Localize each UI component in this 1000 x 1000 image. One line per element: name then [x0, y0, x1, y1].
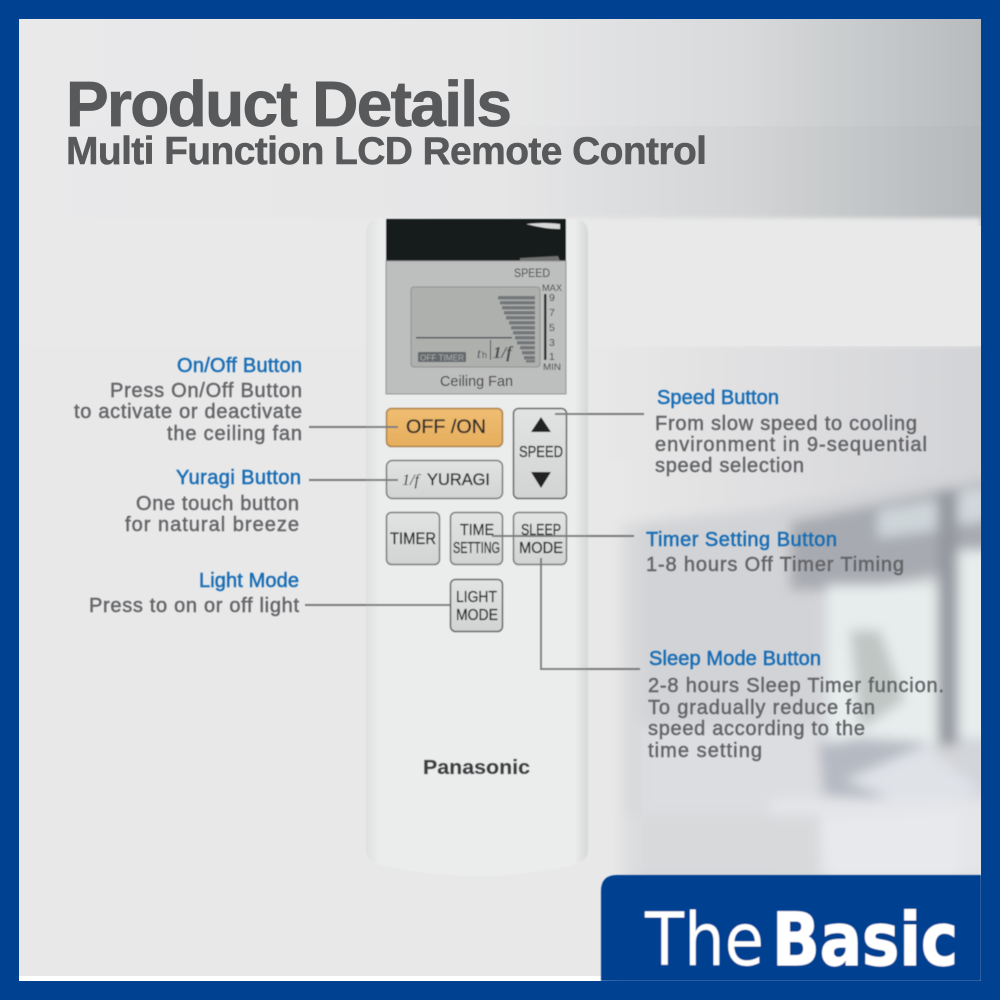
- heading: [66, 68, 707, 173]
- button: off/on: OFF /ON: [406, 417, 486, 438]
- callout: sleep mode button: 2-8 hours Sleep Timer funcion.: [648, 675, 944, 697]
- LCD symbols: 1/f: [493, 343, 514, 362]
- button: speed: SPEED: [519, 444, 563, 461]
- button: time setting: [450, 512, 502, 564]
- callout: timer setting button: Timer Setting Button: [646, 529, 837, 551]
- callout: sleep mode button: time setting: [648, 740, 762, 762]
- button: light mode: MODE: [456, 607, 498, 624]
- speed scale: MIN: [543, 362, 561, 372]
- off timer tag: OFF TIMER: [420, 354, 464, 362]
- callout: on/off button: to activate or deactivate: [74, 401, 302, 423]
- speed scale: 3: [549, 337, 555, 349]
- callout: yuragi button: for natural breeze: [125, 514, 299, 536]
- display panel: [386, 261, 566, 394]
- LCD screen: [411, 287, 540, 367]
- callout: sleep mode button: To gradually reduce fan: [648, 697, 875, 719]
- callout: on/off button: Press On/Off Button: [110, 380, 302, 402]
- callout: light mode: Press to on or off light: [89, 595, 299, 617]
- button: yuragi: [386, 460, 502, 498]
- button: sleep mode: MODE: [519, 540, 563, 557]
- callout: yuragi button: [125, 467, 301, 536]
- speed scale: 7: [549, 307, 555, 319]
- logo text: The: [644, 898, 764, 983]
- callout: speed button: Speed Button: [657, 387, 779, 409]
- button: off/on: [386, 408, 502, 446]
- button: light mode: LIGHT: [456, 589, 497, 606]
- callout: yuragi button: One touch button: [136, 493, 299, 515]
- LCD symbols: h: [482, 350, 487, 360]
- button: sleep mode: [514, 512, 566, 564]
- speed label: SPEED: [514, 266, 550, 280]
- callout: on/off button: [74, 355, 302, 445]
- callout: yuragi button: Yuragi Button: [176, 467, 301, 489]
- black top band: [386, 219, 566, 261]
- button: sleep mode: SLEEP: [521, 522, 561, 539]
- speed scale: [542, 283, 562, 372]
- LCD symbols: [477, 340, 514, 362]
- callout: sleep mode button: Sleep Mode Button: [649, 648, 821, 670]
- brand: Panasonic: Panasonic: [423, 757, 530, 779]
- callout: speed button: [655, 387, 927, 477]
- button: time setting: TIME: [460, 522, 494, 539]
- callout: on/off button: the ceiling fan: [167, 423, 302, 445]
- callout: speed button: From slow speed to cooling: [655, 413, 917, 435]
- callout lines: [305, 414, 644, 669]
- remote body: [366, 219, 588, 876]
- callout: speed button: speed selection: [655, 455, 804, 477]
- callout: timer setting button: [646, 529, 904, 576]
- title: Product Details: [66, 68, 512, 140]
- button: light mode: [450, 580, 502, 632]
- callout: sleep mode button: speed according to the: [648, 718, 865, 740]
- logo panel: [601, 875, 981, 983]
- LCD speed bars: [498, 296, 535, 362]
- callout: speed button: environment in 9-sequential: [655, 434, 927, 456]
- speed scale: 5: [549, 322, 555, 334]
- button: yuragi: YURAGI: [427, 470, 490, 489]
- logo text: Basic: [772, 898, 958, 983]
- callout: sleep mode button: [648, 648, 944, 762]
- button: speed: [514, 408, 566, 498]
- button: time setting: SETTING: [453, 540, 500, 557]
- button: timer: TIMER: [390, 529, 436, 548]
- button: timer: [386, 512, 440, 564]
- remote control: [74, 219, 981, 983]
- callout: timer setting button: 1-8 hours Off Timer Timing: [646, 554, 904, 576]
- LCD symbols: t: [477, 347, 482, 362]
- callout: on/off button: On/Off Button: [177, 355, 302, 377]
- callout: light mode: Light Mode: [199, 570, 299, 592]
- subtitle: Multi Function LCD Remote Control: [66, 130, 707, 173]
- logo text: [644, 898, 958, 983]
- callout: light mode: [89, 570, 299, 617]
- speed scale: 9: [549, 292, 555, 304]
- speed scale: 1: [549, 351, 555, 363]
- speed scale: MAX: [542, 283, 562, 293]
- button: yuragi: 1/f: [402, 472, 421, 489]
- ceiling fan label: Ceiling Fan: [440, 374, 513, 390]
